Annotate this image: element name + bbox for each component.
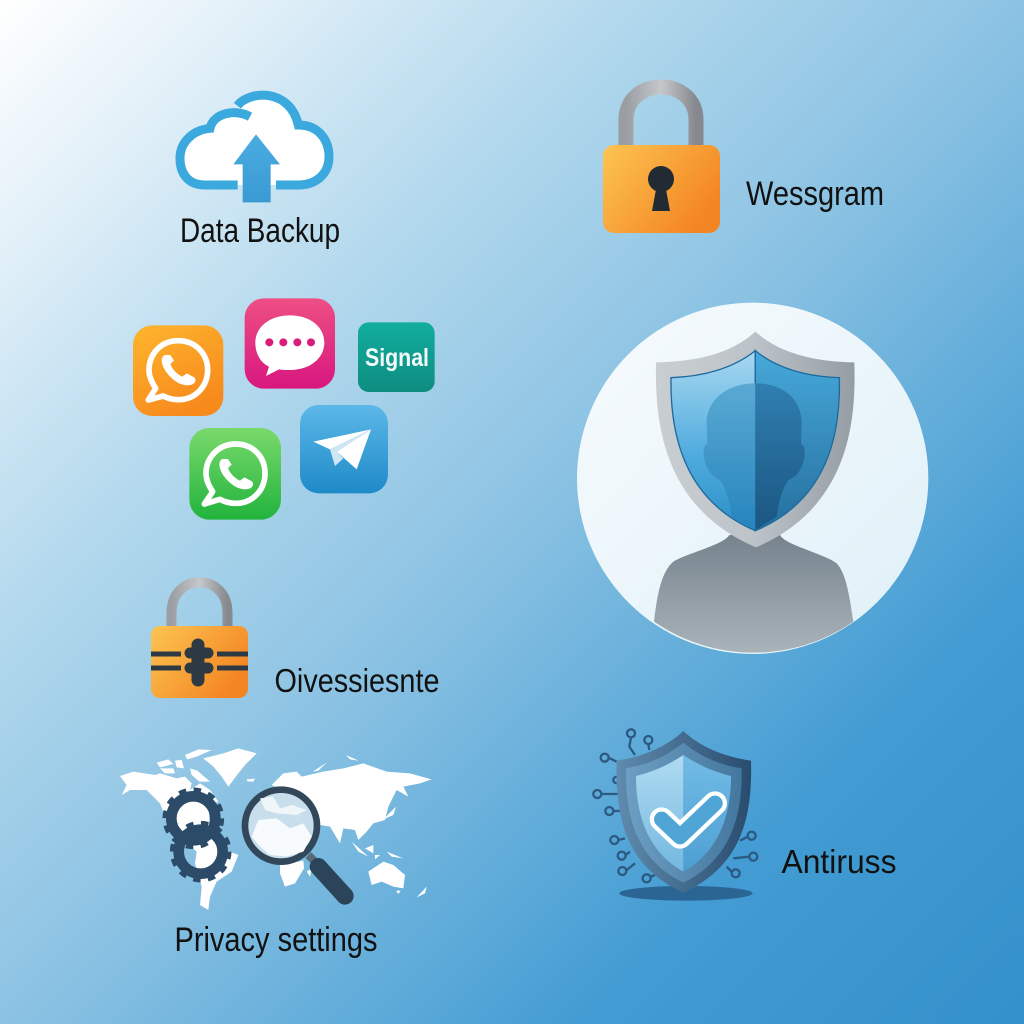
icon: orange padlock xyxy=(603,87,720,233)
icon: cloud upload xyxy=(180,95,329,202)
person silhouette xyxy=(654,535,853,653)
icon: gears xyxy=(165,790,229,880)
world map with gears and magnifier xyxy=(120,748,432,910)
world map xyxy=(120,748,432,910)
panel: shield and person xyxy=(577,303,928,654)
messaging app icons xyxy=(133,298,435,520)
icon: pink message app xyxy=(245,298,335,389)
icon: Telegram xyxy=(300,405,388,493)
icon: combination padlock xyxy=(151,582,248,698)
icon: Signal app: Signal xyxy=(365,344,429,372)
icon: antivirus shield xyxy=(593,729,757,901)
icon: green WhatsApp xyxy=(189,428,281,520)
icon: magnifier xyxy=(245,790,345,896)
shield xyxy=(656,332,855,547)
label: Privacy settings: Privacy settings xyxy=(174,921,378,959)
label: Data Backup: Data Backup xyxy=(180,212,340,250)
label: Antiruss: Antiruss xyxy=(782,843,896,880)
icon: Signal app xyxy=(358,322,435,392)
label: Oivessiesnte: Oivessiesnte xyxy=(274,662,440,699)
label: Wessgram: Wessgram xyxy=(746,175,884,213)
icon: orange chat app xyxy=(133,325,223,416)
